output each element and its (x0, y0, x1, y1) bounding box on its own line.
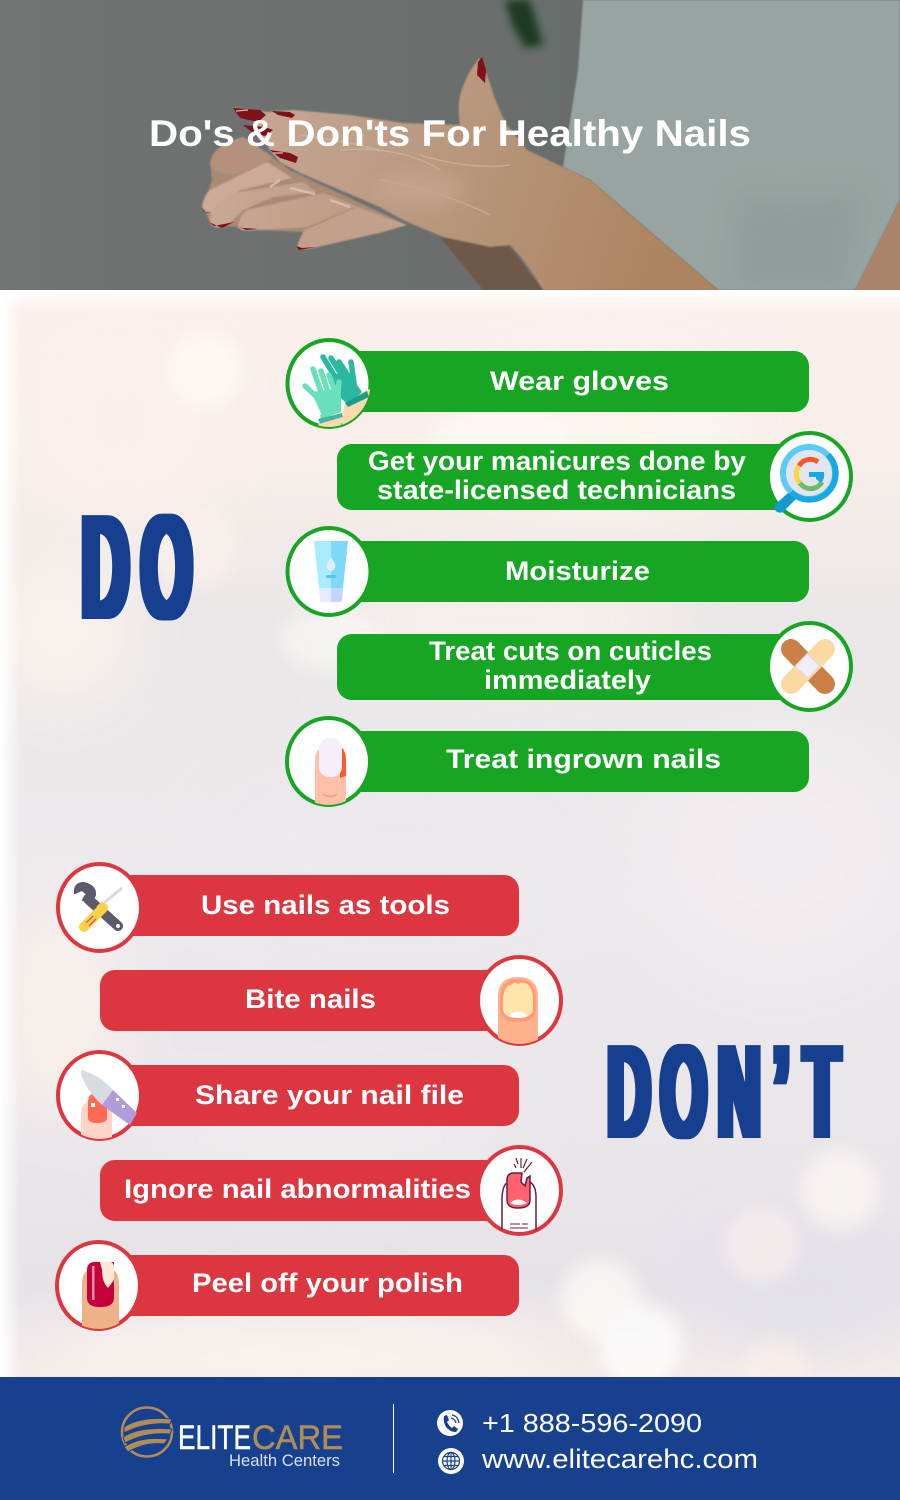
logo: Elite Care Health Centers: CARE (252, 1419, 343, 1457)
logo: Elite Care Health Centers: ELITE (178, 1419, 251, 1457)
item: wear gloves (288, 340, 809, 430)
panel: do items (287, 340, 851, 810)
item: use nails as tools: Use nails as tools (201, 890, 450, 920)
item: bite nails (100, 957, 561, 1045)
heading: DON'T: DON’T (608, 1017, 840, 1165)
icon: globe (438, 1448, 464, 1474)
item: manicures: state-licensed technicians (377, 475, 736, 505)
icon: nail file (81, 1070, 137, 1145)
icon: bitten nail (498, 977, 538, 1045)
panel: don't items (57, 864, 561, 1330)
icon: peeled polish nail (82, 1262, 119, 1330)
icon: bandage (791, 649, 825, 684)
item: share nail file: Share your nail file (195, 1080, 464, 1110)
item: share nail file (58, 1052, 519, 1145)
title: Do's & Don'ts For Healthy Nails (149, 113, 751, 154)
icon: ingrown nail (315, 738, 346, 810)
item: manicures: Get your manicures done by (368, 446, 746, 476)
item: treat cuts (337, 623, 851, 710)
item: moisturize: Moisturize (505, 556, 650, 586)
item: treat ingrown nails (287, 718, 809, 810)
item: wear gloves: Wear gloves (490, 366, 669, 396)
icon: gloves (305, 357, 372, 430)
item: ignore nail abnormalities (100, 1147, 561, 1235)
item: moisturize (288, 528, 809, 615)
footer band (0, 1377, 900, 1500)
text: website: www.elitecarehc.com (481, 1444, 758, 1474)
logo: Elite Care Health Centers: Health Centers (229, 1451, 340, 1470)
icon: phone (437, 1410, 463, 1436)
item: ignore nail abnormalities: Ignore nail abnormalities (124, 1174, 471, 1204)
item: use nails as tools (58, 864, 519, 951)
icon: cracked nail (502, 1158, 536, 1235)
icon: wrench and screwdriver (75, 883, 122, 928)
item: treat cuts: Treat cuts on cuticles (429, 636, 712, 666)
logo: Elite Care Health Centers (122, 1408, 343, 1470)
blurred bokeh background panel (0, 290, 900, 1411)
item: peel off polish (57, 1242, 519, 1330)
text: phone number: +1 888-596-2090 (482, 1408, 702, 1438)
header photo: hands with red nails (0, 0, 900, 290)
item: treat ingrown nails: Treat ingrown nails (446, 744, 721, 774)
icon: magnifier with G (774, 447, 836, 513)
item: manicures (337, 433, 851, 520)
icon: cream tube (314, 541, 348, 602)
heading: DO: DO (82, 486, 192, 650)
item: peel off polish: Peel off your polish (192, 1268, 463, 1298)
item: bite nails: Bite nails (245, 984, 376, 1014)
item: treat cuts: immediately (484, 665, 651, 695)
